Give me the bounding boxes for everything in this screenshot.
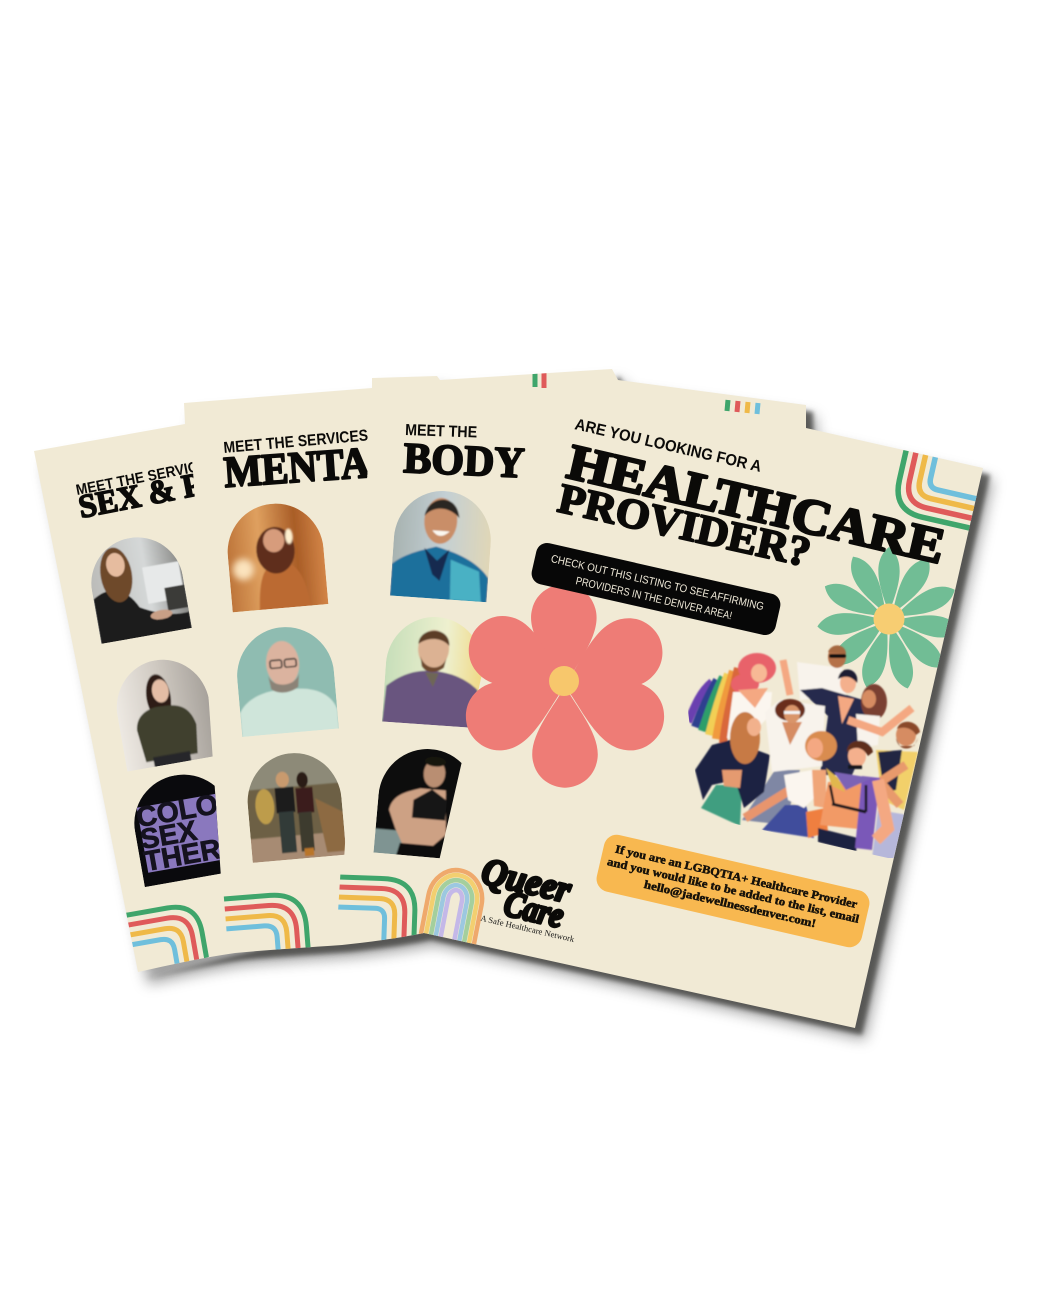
icon: green flower [816,547,962,691]
photo: woman in black blazer [91,538,192,644]
callout: black listing pill [529,541,783,637]
rainbow corner [126,904,209,964]
red haired woman [727,653,790,742]
logo: queer care wordmark [471,850,590,944]
rainbow corner [338,874,418,940]
photo: couple outdoors [248,753,346,863]
flyer fan mockup [34,369,1000,1047]
callout: orange provider invitation: and you would like to be added to the list, email [606,856,860,926]
heading: meet the: MEET THE [405,422,478,442]
photo: person in black crop top [374,749,462,858]
flyer 2: mental [218,427,372,969]
photo: bald man with glasses [237,627,339,737]
photo: colorado sex therapy logo: SEX [138,814,199,855]
rainbow corner top right [895,450,976,531]
man in navy suit [800,670,874,775]
heading: are you looking for a: ARE YOU LOOKING FOR A [573,416,763,476]
heading: body: BODY [403,435,525,487]
flyer 4: are you looking for a healthcare provider [421,373,1000,950]
icon: pink flower [466,586,664,788]
callout: orange provider invitation [594,832,872,950]
callout: orange provider invitation: hello@jadewellnessdenver.com! [643,879,817,930]
illustration: diverse crowd with rainbow flag [688,645,920,860]
photo: colorado sex therapy logo: THERAPY [142,822,281,877]
logo: queer care wordmark: A Safe Healthcare Network [480,913,576,944]
photo: colorado sex therapy logo: COLORADO [134,773,302,833]
callout: orange provider invitation: If you are an LGBQTIA+ Healthcare Provider [614,844,858,911]
back flyers [75,422,525,985]
photo: colorado sex therapy logo [134,774,221,887]
heading: menta: MENTA [222,438,372,497]
man in harness with purple cape [818,741,888,852]
rainbow corner [224,892,310,950]
logo: queer care wordmark: Care [500,883,568,936]
brown haired woman [848,684,912,748]
callout: black listing pill: PROVIDERS IN THE DENVER AREA! [574,575,733,622]
sheet shadows [44,376,993,1040]
top stripes of hidden sheets [535,373,758,414]
cream flyer sheets [34,369,983,1028]
bearded man [872,722,920,860]
flyer 3: body [335,422,525,955]
photo: woman in warm light [228,504,328,612]
callout: black listing pill: CHECK OUT THIS LISTING TO SEE AFFIRMING [550,553,765,613]
sunglasses person [797,645,846,700]
logo: rainbow arch [421,865,487,944]
photo: smiling person in blue shirt [390,491,491,602]
flyer 1: sex and pleasure [76,462,221,964]
rainbow flag [688,668,738,743]
heading: meet the services: MEET THE SERVICES [223,427,369,457]
woman with glasses [742,699,825,825]
heading: healthcare: HEALTHCARE [563,433,950,574]
heading: meet the services: MEET THE SERVICES [75,455,217,499]
heading: sex and p: SEX & P [76,467,205,526]
logo: queer care wordmark: Queer [478,850,576,912]
photo: man in purple shirt [382,617,482,728]
photo: woman in green sweater [117,660,213,772]
orange haired person [745,731,837,838]
heading: provider: PROVIDER? [554,476,815,576]
ginger woman in jacket [695,712,770,826]
